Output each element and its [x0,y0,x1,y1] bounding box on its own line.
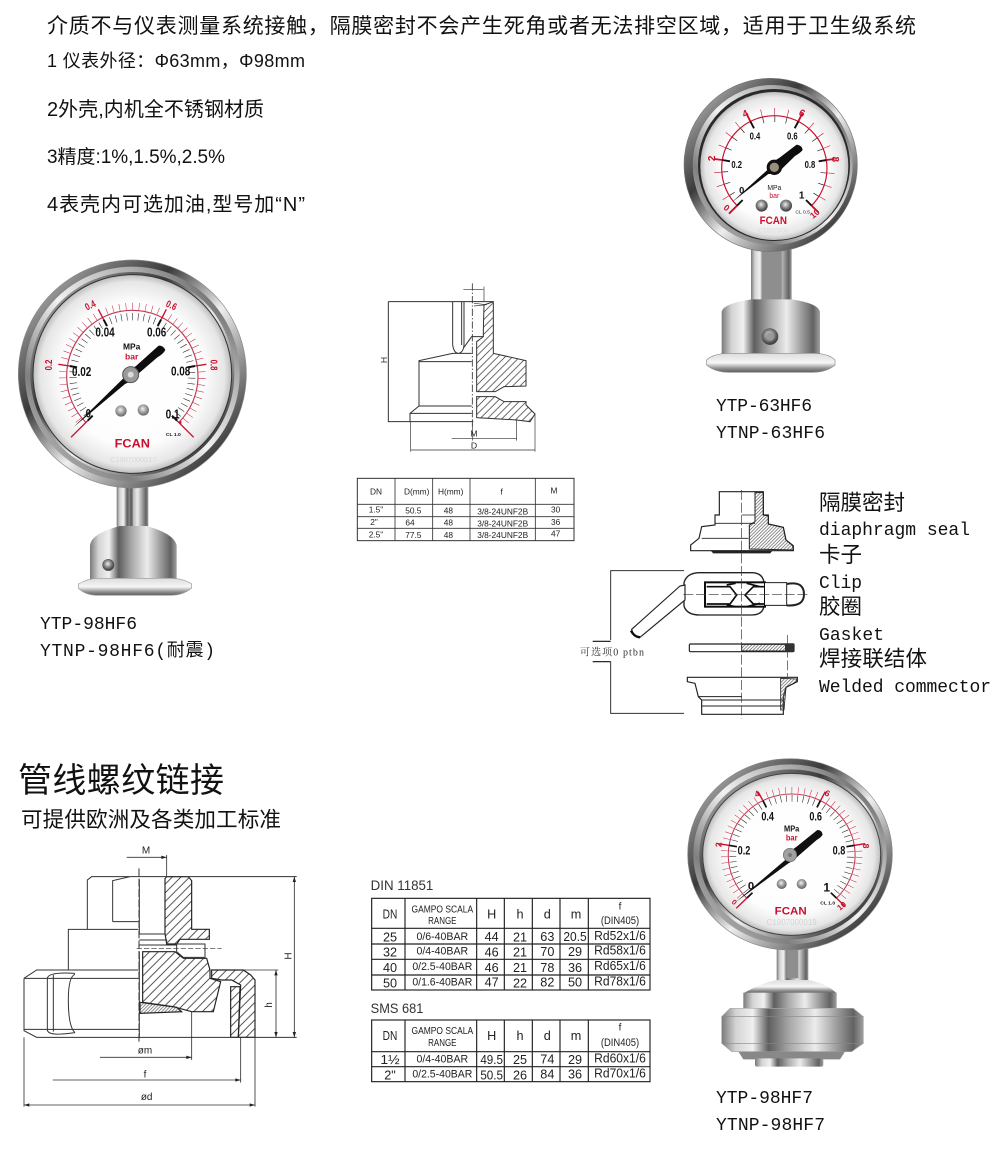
dial labels: 0.8 [208,360,219,371]
legend: connector en: Welded commector [819,678,991,698]
dimension labels: H [283,952,294,960]
dimension labels: D [471,440,477,450]
welded connector part [687,677,797,714]
dial labels: 0.6 [787,131,798,142]
DIN 11851 table: 78 [540,961,554,975]
dial labels [713,788,871,927]
stem and clamp body [78,483,192,595]
DIN 11851 table: 47 [485,976,499,990]
DIN 11851 table: 0/6-40BAR [416,931,468,943]
dial labels: C1907000 [758,227,789,234]
gauge bezel [18,260,246,488]
DIN 11851 table: 44 [485,930,499,944]
DIN 11851 table: 82 [540,976,554,990]
stem and clamp body [707,247,835,372]
SMS 681 table: 50.5 [480,1068,503,1082]
DIN 11851 table: DN [383,908,397,922]
DIN 11851 table: H [487,908,496,922]
section heading: threaded pipe connection: 管线螺纹链接 [18,762,224,800]
exploded view drawing: seal, clip, gasket, connector [580,490,807,718]
gauge bezel [688,759,892,950]
gasket part [689,643,794,652]
dimension table: DN / D / H / f / M: 47 [551,529,561,539]
hatched sections [140,877,255,1037]
outline drawing [388,283,535,452]
outline [24,855,297,1107]
SMS 681 table: Rd60x1/6 [594,1052,646,1066]
DIN 11851 table: 70 [540,945,554,959]
dimension labels: h [264,1002,275,1008]
model label: YTP-98HF6: YTP-98HF6 [40,615,137,635]
dial labels: FCAN [115,436,150,450]
dimension labels: øm [138,1045,152,1056]
dimension table: DN / D / H / f / M: 2.5" [369,529,383,539]
dial screws [756,200,792,212]
dial labels: C1907000017 [110,455,156,464]
title text: 介质不与仪表测量系统接触，隔膜密封不会产生死角或者无法排空区域，适用于卫生级系统 [47,15,916,38]
legend: diaphragm seal en: diaphragm seal [819,521,970,541]
DIN 11851 table: 46 [485,961,499,975]
DIN 11851 table: d [544,908,551,922]
dimension table: DN / D / H / f / M: 48 [444,530,453,540]
SMS 681 table: 0/2.5-40BAR [412,1069,472,1081]
SMS 681 table: 29 [568,1053,582,1067]
DIN 11851 table: 20.5 [563,930,587,944]
dial scale [714,108,834,214]
dimension table: DN / D / H / f / M: 3/8-24UNF2B [477,506,529,516]
DIN 11851 table: RANGE [428,916,457,927]
dial labels: 0.1 [166,406,180,421]
SMS 681 caption: SMS 681 [371,1001,423,1016]
dimension labels: ød [141,1092,152,1103]
dial labels: 6 [823,788,832,799]
DIN 11851 table: h [516,908,524,922]
SMS 681 table: d [544,1029,551,1043]
dial labels: MPa [123,341,140,351]
DIN 11851 table [372,898,650,990]
DIN 11851 table: 22 [513,976,527,990]
dial labels: CL 1.0 [820,900,835,906]
dial labels: 0.2 [738,844,751,858]
section drawing: diaphragm seal dimensions [379,283,535,452]
arrowheads [24,856,296,1107]
dial labels: 4 [741,108,751,121]
DIN 11851 table: 50 [568,976,582,990]
dial labels: 0.6 [809,810,822,824]
gauge needle [732,145,803,202]
SMS 681 table: 2" [384,1068,396,1082]
dial labels: 0.4 [750,131,761,142]
SMS 681 table: GAMPO SCALA [411,1026,473,1037]
DIN 11851 table: 21 [513,961,527,975]
DIN 11851 table: 0/2.5-40BAR [412,961,472,973]
dial labels: 0 [748,880,754,892]
DIN 11851 table: 40 [383,961,397,975]
dimension table: DN / D / H / f / M: f [501,486,504,496]
dial labels: 1 [823,880,830,894]
dial labels: 2 [713,842,723,847]
DIN 11851 table: (DIN405) [601,915,639,927]
dial labels: 0.6 [164,299,179,313]
dimension table: DN / D / H / f / M: 77.5 [405,530,422,540]
gauge needle [735,830,823,903]
dial labels: 0 [722,202,732,213]
dial labels: 0.8 [805,160,816,171]
parts legend [819,491,991,698]
dial labels: 8 [829,157,840,163]
legend: clip zh: 卡子 [819,543,862,567]
dimension labels: f [144,1069,147,1080]
DIN 11851 table: 0/4-40BAR [416,946,468,958]
SMS 681 table: 36 [568,1068,582,1082]
dimension labels: M [470,429,478,439]
dial labels: MPa [767,183,782,192]
DIN 11851 table: Rd52x1/6 [594,929,646,943]
dial labels [707,108,840,234]
gauge needle [73,346,165,427]
DIN 11851 table: Rd58x1/6 [594,944,646,958]
dial labels: CL 0.5 [795,209,810,215]
dial labels: 0.2 [44,359,55,370]
DIN 11851 table: 21 [513,946,527,960]
dial labels: 0.04 [95,325,115,340]
dial labels: 0.8 [833,844,846,858]
dial labels: 2 [707,155,718,161]
dial labels: 1 [799,190,805,201]
dial labels [44,299,219,464]
dial labels: 0.08 [171,363,190,378]
model label: YTP-63HF6: YTP-63HF6 [716,397,812,417]
model label: YTP-98HF7: YTP-98HF7 [716,1089,813,1109]
dial labels: 0.4 [83,299,98,313]
SMS 681 table: DN [383,1029,397,1043]
dimension table: DN / D / H / f / M: 3/8-24UNF2B [477,518,529,528]
dial screws [115,404,149,417]
clip part with handle [631,573,807,637]
dimension labels: H [379,357,389,363]
SMS 681 table: 84 [540,1068,554,1082]
DIN 11851 table: 25 [383,931,397,945]
model label: YTNP-98HF7: YTNP-98HF7 [716,1116,825,1136]
legend: clip en: Clip [819,574,862,594]
legend: gasket en: Gasket [819,626,884,646]
legend: connector zh: 焊接联结体 [819,647,927,671]
hatched section [477,302,526,392]
DIN 11851 table: 29 [568,945,582,959]
hatched lower section [477,397,535,422]
DIN 11851 table: 36 [568,961,582,975]
legend: gasket zh: 胶圈 [819,595,862,619]
SMS 681 table: 25 [513,1053,527,1067]
SMS 681 table: 49.5 [480,1053,503,1067]
dimension table: DN / D / H / f / M: 1.5" [369,505,383,515]
dial labels: 10 [808,207,822,221]
dimension table: DN / D / H / f / M: 64 [405,518,415,528]
DIN 11851 table: 63 [540,930,554,944]
gauge photo: YTP-98HF7 [688,759,892,1067]
SMS 681 table: 74 [540,1052,554,1066]
dimension table: DN / D / H / f / M: 36 [551,517,561,527]
DIN 11851 table: f [619,901,622,912]
dimension table: DN / D / H / f / M [357,478,574,541]
dimension table: DN / D / H / f / M: 2" [370,517,378,527]
section drawing: threaded connection [24,845,297,1107]
stem and union nut [722,947,863,1067]
gauge bezel [684,78,857,252]
dial labels: 0 [86,407,91,421]
dial labels: bar [786,834,797,843]
dial labels: bar [769,191,780,200]
option annotation: 可选项0 ptbn [580,646,644,659]
dial scale [718,787,866,909]
dial labels: 4 [753,788,762,799]
DIN 11851 table: 50 [383,976,397,990]
DIN 11851 table: 0/1.6-40BAR [412,976,472,988]
DIN 11851 caption: DIN 11851 [371,878,433,893]
spec list [47,51,305,216]
dial labels: bar [125,351,139,361]
dial labels: 6 [797,108,807,120]
gauge photo: YTP-63HF6 [684,78,857,372]
dimension table: DN / D / H / f / M: 3/8-24UNF2B [477,530,529,540]
SMS 681 table: RANGE [428,1038,457,1049]
model label: YTNP-63HF6: YTNP-63HF6 [716,424,825,444]
dial labels: 0.2 [731,160,742,171]
SMS 681 table: Rd70x1/6 [594,1067,646,1081]
DIN 11851 table: m [571,908,581,922]
SMS 681 table: m [571,1029,581,1043]
SMS 681 table: 0/4-40BAR [416,1054,468,1066]
dimension labels [379,357,478,450]
SMS 681 table: f [619,1023,622,1034]
SMS 681 table: 1½ [380,1053,400,1067]
dial labels: MPa [784,825,800,834]
dimension table: DN / D / H / f / M: 30 [551,504,561,514]
dimension table: DN / D / H / f / M: 48 [444,505,453,515]
DIN 11851 table: Rd65x1/6 [594,959,646,973]
DIN 11851 table: 46 [485,945,499,959]
spec 3: accuracy: 3精度:1%,1.5%,2.5% [47,146,225,168]
DIN 11851 table: Rd78x1/6 [594,974,646,988]
dial labels: 0.4 [761,810,774,824]
dial labels: 8 [861,844,871,849]
dial labels: 0.06 [147,325,166,340]
dial scale [58,302,206,438]
dial labels: 0 [730,897,739,907]
dimension table: DN / D / H / f / M: DN [370,486,382,496]
SMS 681 table: (DIN405) [601,1037,639,1049]
DIN 11851 table: GAMPO SCALA [411,905,473,916]
dimension table: DN / D / H / f / M: M [551,485,558,495]
dimension labels: M [142,845,150,856]
dimension table: DN / D / H / f / M: 50.5 [405,505,422,515]
gauge photo: YTP-98HF6 [18,260,246,595]
dial labels: C1907000019 [767,918,817,927]
DIN 11851 table: 21 [513,931,527,945]
dimension labels [138,845,294,1103]
dial labels: 0.02 [72,364,91,379]
legend: diaphragm seal zh: 隔膜密封 [819,491,905,515]
dial labels: 10 [835,899,848,912]
spec 1: gauge diameter: 1 仪表外径：Φ63mm，Φ98mm [47,51,305,71]
dial labels: FCAN [775,906,807,918]
SMS 681 table: 26 [513,1068,527,1082]
spec 2: material: 2外壳,内机全不锈钢材质 [47,98,264,121]
dial labels: 0 [739,185,744,195]
SMS 681 table [372,1020,650,1082]
dimension table: DN / D / H / f / M: H(mm) [438,486,464,496]
dial labels: CL 1.0 [166,432,181,438]
diaphragm seal part [691,492,793,553]
dial screws [777,879,807,889]
section subheading: 可提供欧洲及各类加工标准 [21,807,281,832]
center lines and bracket [593,490,787,718]
spec 4: oil filling option: 4表壳内可选加油,型号加“N” [47,193,305,216]
dimension table: DN / D / H / f / M: D(mm) [404,486,430,496]
standards tables [371,878,650,1082]
dial labels: FCAN [760,215,787,227]
dimension table: DN / D / H / f / M: 48 [444,518,453,528]
DIN 11851 table: 32 [383,946,397,960]
SMS 681 table: h [516,1029,524,1043]
SMS 681 table: H [487,1029,496,1043]
model label: YTNP-98HF6: YTNP-98HF6(耐震) [40,640,215,662]
